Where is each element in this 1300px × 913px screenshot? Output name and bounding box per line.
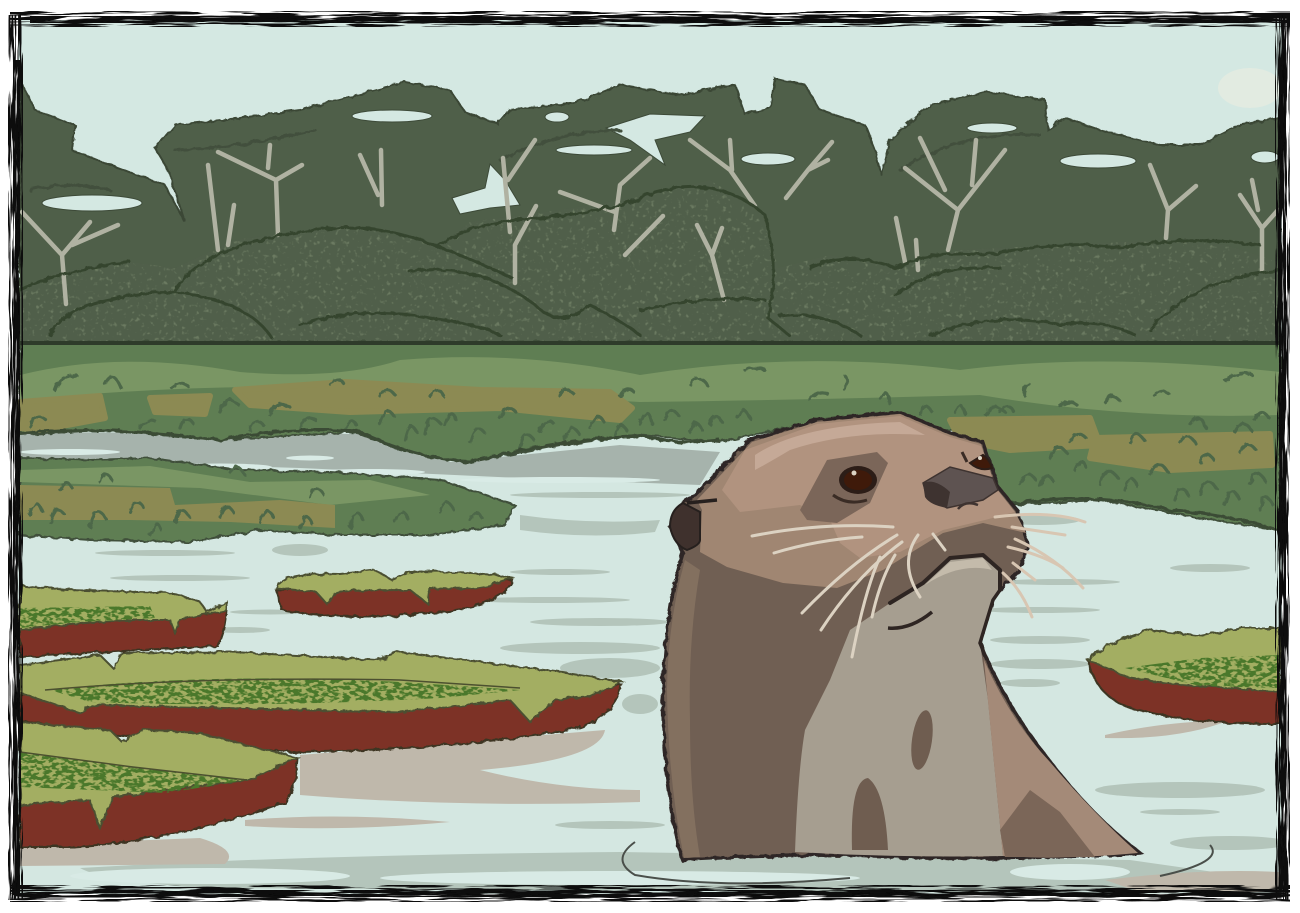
lily pad: bottom left: [20, 722, 298, 847]
lily pad: top left: [20, 585, 227, 657]
otter: head highlight: [755, 422, 925, 470]
otter: lighter head and muzzle: [722, 416, 1015, 558]
marsh grass tufts: [30, 368, 1272, 510]
lily pad: large middle: [20, 652, 622, 752]
otter: mouth: [890, 555, 1000, 603]
tree trunks and branches: [22, 138, 1278, 304]
lily pads: [20, 570, 1280, 847]
otter: ear: [670, 503, 700, 550]
otter: neck grey fur: [795, 555, 1003, 856]
otter: left lighter band: [667, 560, 700, 858]
lily pad reflections: [20, 720, 1280, 892]
otter: body: [663, 412, 1140, 860]
otter: far eye: [962, 452, 992, 469]
marsh island: [20, 458, 515, 542]
otter: cream chin: [925, 558, 992, 585]
lily pad: right: [1088, 628, 1280, 724]
otter: eye: [833, 466, 877, 502]
otter: nose: [923, 467, 998, 509]
otter: left whiskers: [752, 526, 945, 657]
giant otter: [622, 412, 1213, 883]
sky gaps in canopy: [42, 110, 1279, 214]
otter: head fur: [697, 414, 1026, 588]
otter: chest markings: [911, 710, 933, 770]
otter: neck outline: [980, 590, 1000, 660]
otter: water line ripple: [622, 842, 1213, 883]
otter: eye patch: [800, 452, 888, 523]
water: [16, 430, 1284, 900]
lily pad: small centre: [276, 570, 512, 617]
water ripples: [80, 492, 1290, 892]
foreground bushes: [20, 292, 1279, 341]
marsh bank: [20, 342, 1280, 530]
sky: [16, 18, 1284, 358]
far bank water shadow: [20, 432, 720, 485]
otter: right flank fur: [984, 660, 1138, 857]
forest canopy: [20, 78, 1280, 345]
otter: right whiskers: [995, 514, 1085, 617]
canopy contour lines: [30, 130, 1040, 190]
